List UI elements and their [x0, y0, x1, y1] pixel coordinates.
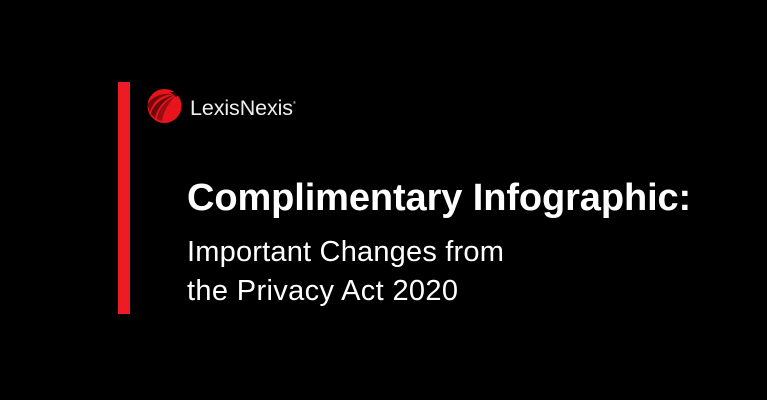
title: Complimentary Infographic:: [187, 177, 691, 219]
red vertical bar: [118, 82, 130, 314]
subtitle: the Privacy Act 2020: [187, 274, 458, 306]
subtitle: Important Changes from: [187, 236, 504, 268]
subtitle: [187, 236, 504, 306]
icon: LexisNexis red globe: [148, 89, 182, 123]
logo wordmark: LexisNexis®: [190, 96, 296, 120]
logo: LexisNexis: [148, 89, 296, 123]
